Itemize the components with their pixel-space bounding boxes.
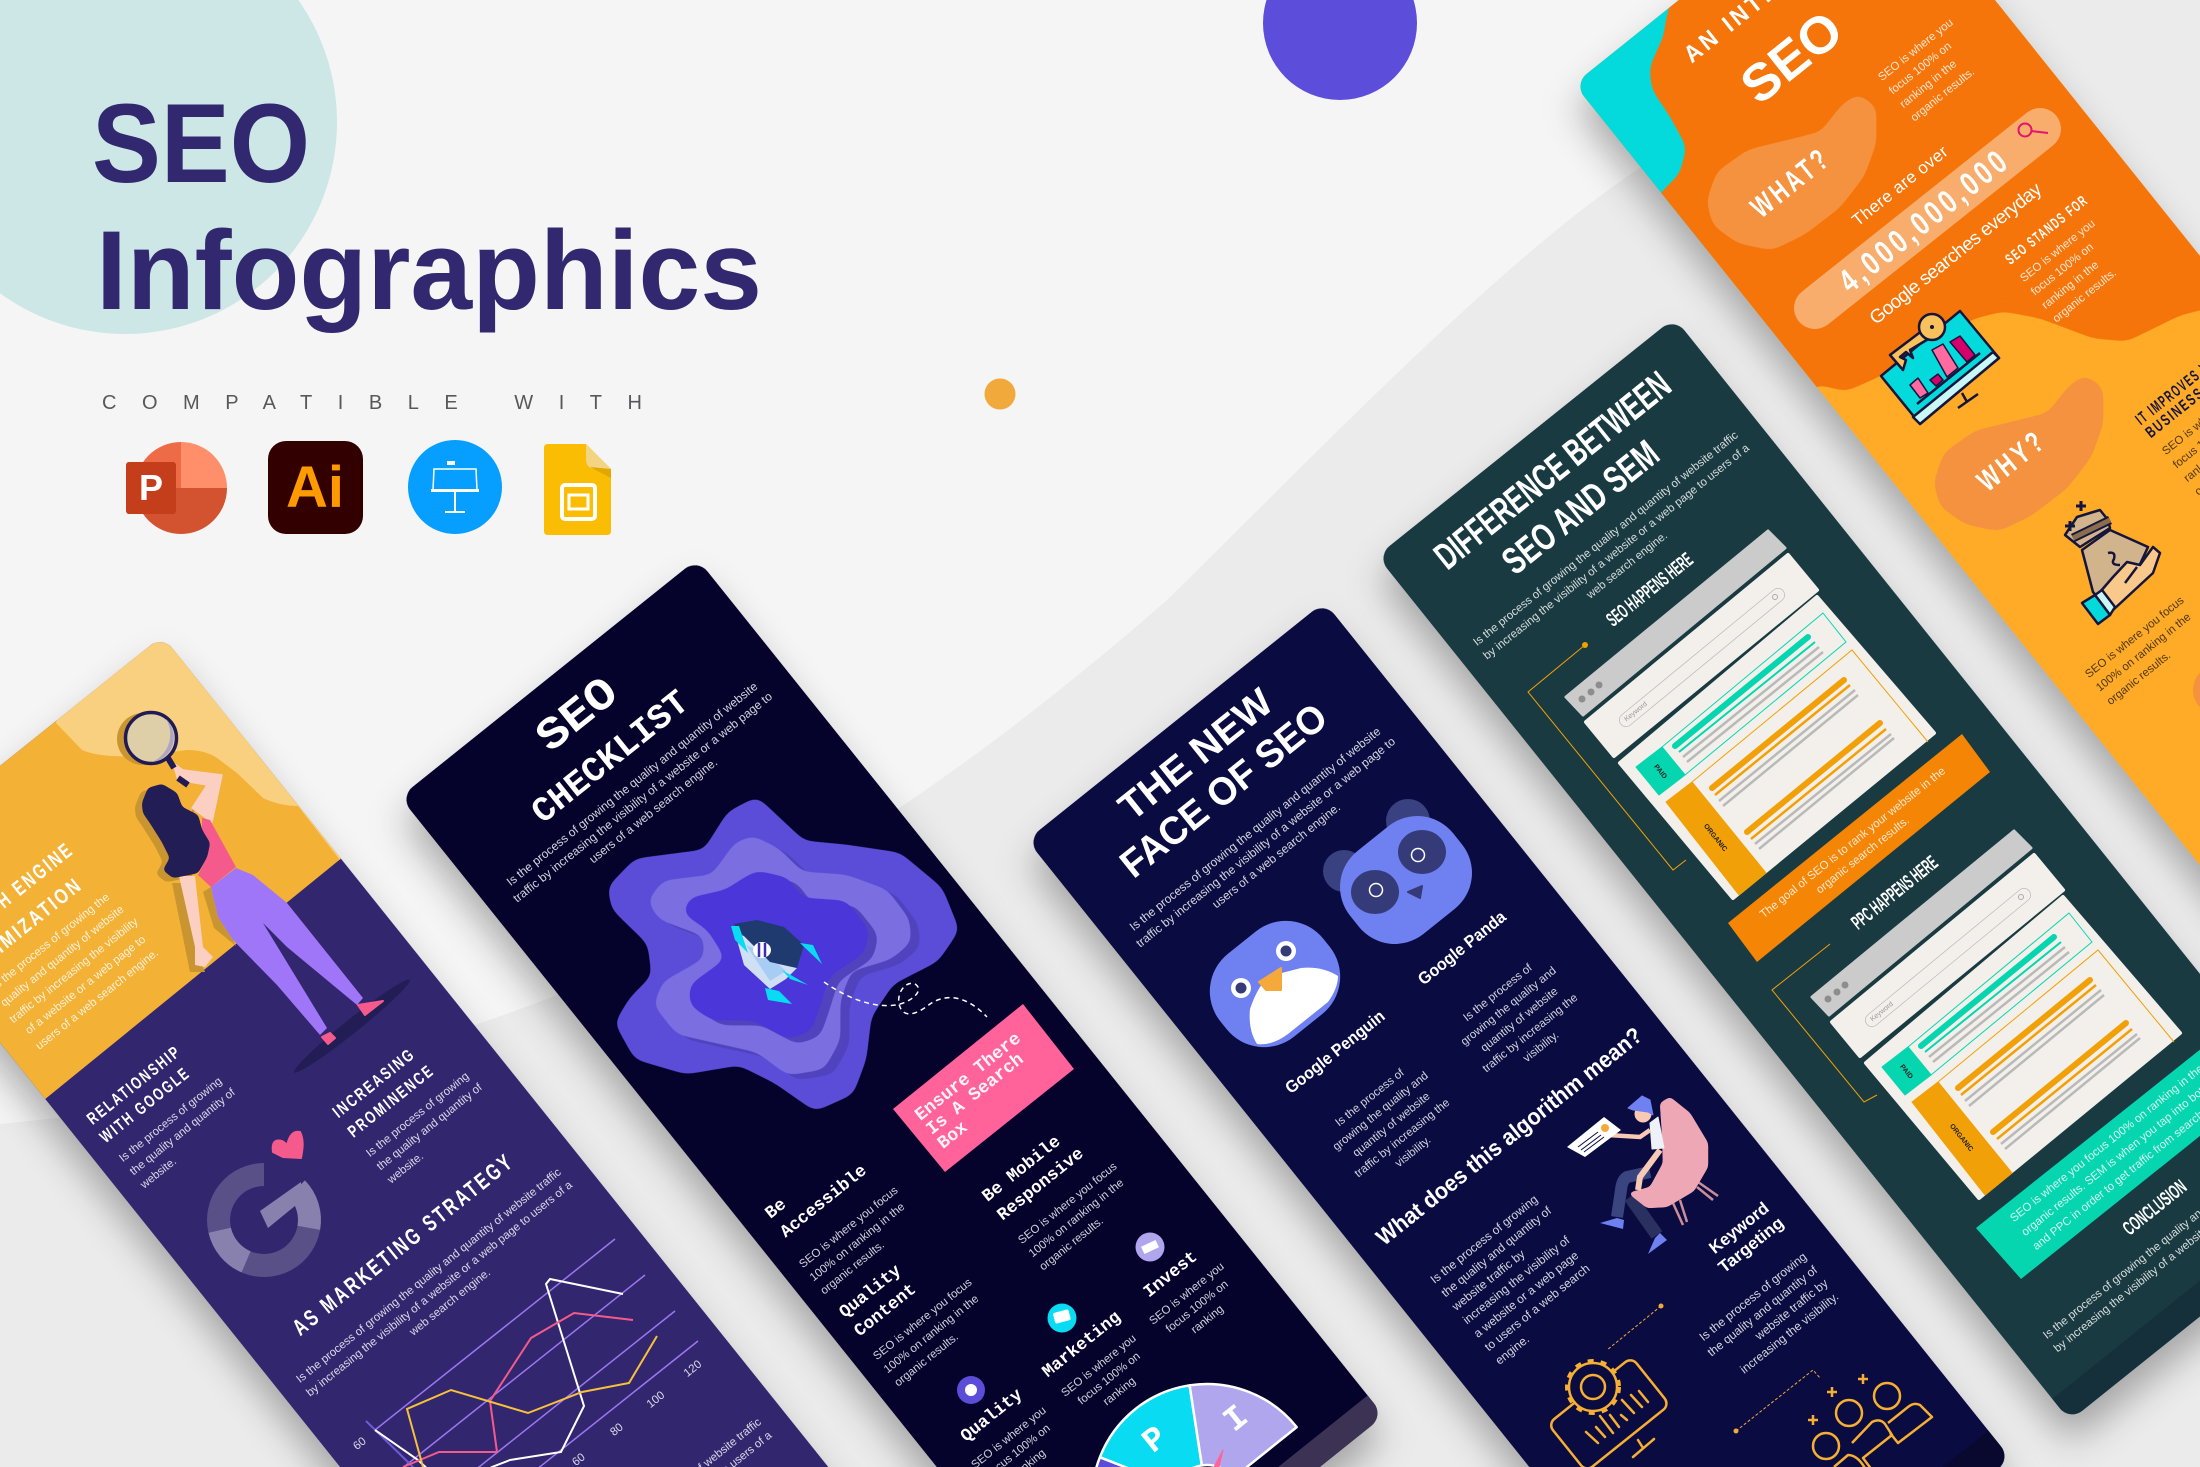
checklist item: be mobile responsive: Responsive [994, 1144, 1088, 1226]
blob: why [1934, 375, 2103, 531]
heading: what does this algorithm mean: What does this algorithm mean? [1371, 1022, 1647, 1250]
search pill with number: 4,000,000,000 [1831, 141, 2017, 299]
text: why paragraph: organic results. [2105, 650, 2173, 708]
checklist item: quality [957, 1385, 1069, 1467]
checklist item: be mobile responsive: 100% on ranking in the [1027, 1177, 1126, 1260]
dashed connectors [1607, 1304, 1820, 1434]
line chart [351, 1239, 704, 1467]
text: checklist intro: traffic by increasing the visibility of a website or a web page to [510, 689, 775, 905]
purple decorative circle [1263, 0, 1417, 100]
dashed flight path [824, 982, 987, 1017]
chart: PI wheel [1092, 1384, 1297, 1467]
text: penguin paragraph: Is the process of [1333, 1066, 1407, 1129]
illustration: person in pink chair [1567, 1096, 1718, 1254]
checklist item: marketing: ranking [1101, 1375, 1138, 1408]
text: algorithm paragraph: Is the process of growing [1428, 1192, 1540, 1286]
panel: introduction to SEO card [1565, 0, 2200, 920]
text: panda paragraph: Is the process of [1461, 961, 1535, 1024]
heading: increasing prominence [329, 1044, 438, 1141]
text: difference intro: by increasing the visibility of a website or a web page to users of a [1481, 442, 1752, 662]
heading: an introduction to SEO [1679, 0, 1940, 116]
text: penguin paragraph: quantity of website [1351, 1091, 1433, 1159]
illustration: rocket [731, 920, 822, 1004]
icon: marketing chat [1048, 1304, 1076, 1332]
title [92, 81, 762, 333]
checklist item: marketing: SEO is where you [1059, 1333, 1139, 1399]
text: why paragraph: SEO is where you focus [2083, 594, 2187, 681]
text: keyword paragraph: increasing the visibility. [1737, 1289, 1841, 1376]
heading: keyword targeting: Targeting [1715, 1213, 1787, 1277]
label: PPC happens here: PPC HAPPENS HERE [1848, 852, 1942, 934]
teal decorative circle [0, 0, 337, 334]
illustration: panda [1321, 797, 1491, 963]
icon: monitor with key [1881, 311, 1999, 424]
text: checklist intro: Is the process of growing the quality and quantity of website [504, 679, 761, 889]
icon: PowerPoint [126, 442, 227, 534]
checklist item: quality content: SEO is where you focus [871, 1276, 975, 1363]
text: intro paragraph: quality and quantity of website [0, 904, 126, 1009]
heading: relationship with google [83, 1042, 194, 1147]
connector bracket 1 [1528, 642, 1686, 870]
browser mockup 1 [1566, 531, 1934, 898]
text: penguin paragraph: visibility. [1393, 1134, 1433, 1170]
text: stands for paragraph: focus 100% on [2029, 241, 2096, 298]
text: intro paragraph: traffic by increasing the visibility [8, 916, 141, 1026]
text: checklist intro: users of a web search engine. [586, 755, 720, 866]
labels: browser 2: PAID [1898, 1063, 1914, 1081]
heading: relationship with google: RELATIONSHIP [83, 1042, 185, 1128]
text: keyword paragraph: Is the process of growing [1697, 1250, 1809, 1344]
stat: there are over: There are over [1848, 142, 1952, 230]
text: intro paragraph: SEO is where you [1876, 17, 1956, 84]
text: panda paragraph: visibility. [1521, 1029, 1561, 1065]
text: algorithm paragraph: the quality and quantity of [1438, 1203, 1554, 1300]
checklist item: be mobile responsive: Be Mobile [979, 1132, 1065, 1207]
text: marketing paragraph: Is the process of growing the quality and quantity of website traffic [294, 1166, 564, 1386]
checklist item: be mobile responsive: organic results. [1038, 1215, 1106, 1273]
chart: PI wheel: P [1136, 1420, 1176, 1462]
text: keyword paragraph: the quality and quantity of [1705, 1262, 1821, 1359]
icon: PowerPoint: P [139, 467, 163, 508]
text: prominence paragraph: website. [385, 1150, 426, 1187]
text: difference intro: Is the process of growing the quality and quantity of website traffic [1471, 429, 1741, 649]
chart: PI wheel: I [1217, 1399, 1257, 1441]
banner: goal of SEO [1728, 734, 1990, 962]
labels: browser 1: ORGANIC [1702, 823, 1728, 853]
panel: SEO checklist card [400, 559, 1393, 1467]
icon: quality bolt [957, 1376, 985, 1404]
connector bracket 2 [1772, 944, 1877, 1102]
heading: keyword targeting: Keyword [1705, 1198, 1773, 1258]
checklist item: invest: Invest [1140, 1247, 1202, 1303]
text: marketing paragraph: web search engine. [407, 1267, 493, 1339]
icon: money bag in hand [2065, 501, 2160, 624]
line chart: 100 [645, 1389, 667, 1411]
checklist item: marketing: Marketing [1039, 1308, 1125, 1382]
heading: the new face of SEO: THE NEW [1111, 681, 1281, 829]
text: penguin paragraph: traffic by increasing the [1353, 1097, 1452, 1180]
blob: partial right [2193, 665, 2200, 715]
text: panda paragraph: growing the quality and [1459, 965, 1559, 1048]
heading: as marketing strategy: AS MARKETING STRATEGY [287, 1148, 519, 1340]
checklist item: invest: SEO is where you [1147, 1261, 1227, 1327]
text: penguin paragraph: growing the quality and [1331, 1070, 1431, 1153]
stat: google searches everyday: Google searches everyday [1866, 179, 2046, 329]
text: stands for paragraph: organic results. [2051, 267, 2119, 325]
text: stands for paragraph: ranking in the [2040, 259, 2101, 312]
labels: browser 2 [1869, 1001, 1974, 1153]
illustration: woman with magnifier [117, 712, 414, 1078]
title: Infographics [96, 208, 762, 333]
line chart: 120 [682, 1358, 704, 1380]
callout: ensure there is a search box: Is A Search [923, 1050, 1028, 1140]
illustration: layered paper blob [608, 797, 959, 1111]
heading: SEO checklist: SEO [527, 668, 629, 764]
text: keyword paragraph: website traffic by [1752, 1276, 1831, 1343]
heading: search engine optimization [0, 838, 87, 984]
heading: it improves your business [2133, 343, 2200, 442]
heading: difference between SEO and SEM: DIFFERENCE BETWEEN [1427, 364, 1679, 578]
panel: new face of SEO card [1027, 602, 2013, 1467]
title: SEO [92, 81, 310, 206]
text: intro paragraph: users of a web search engine. [34, 947, 161, 1052]
checklist item: invest: ranking [1189, 1303, 1226, 1336]
icon: Google G [219, 1174, 309, 1266]
heading: SEO stands for: SEO STANDS FOR [2002, 192, 2092, 268]
heading: keyword targeting [1705, 1198, 1787, 1277]
labels: browser 1 [1623, 701, 1728, 853]
text: algorithm paragraph: website traffic by [1448, 1247, 1528, 1314]
heading: increasing prominence: INCREASING [329, 1044, 419, 1122]
text: intro paragraph: ranking in the [1898, 58, 1959, 111]
icon: Google Slides [544, 444, 611, 535]
text: intro paragraph: focus 100% on [1887, 40, 1954, 97]
checklist item: be accessible: organic results. [819, 1239, 887, 1297]
callout: ensure there is a search box [893, 1004, 1074, 1172]
checklist item: be mobile responsive [979, 1126, 1141, 1273]
text: panda paragraph: traffic by increasing the [1481, 992, 1580, 1075]
text: algorithm paragraph: a website or a web page [1471, 1248, 1581, 1340]
banner: SEO vs SEM summary [1976, 1050, 2200, 1279]
text: relationship paragraph: website. [138, 1155, 179, 1192]
checklist item: quality content: Quality [836, 1261, 906, 1323]
icon: Illustrator [268, 441, 363, 534]
checklist item: quality content: Content [851, 1280, 921, 1342]
label: why: WHY? [1971, 424, 2053, 498]
text: difference intro: web search engine. [1584, 530, 1670, 602]
label: google panda: Google Panda [1414, 907, 1510, 989]
checklist item: be mobile responsive: SEO is where you focus [1016, 1160, 1120, 1247]
labels: browser 1: Keyword [1623, 701, 1649, 723]
checklist item: invest: focus 100% on [1164, 1278, 1231, 1335]
icon: heart [273, 1132, 303, 1158]
text: intro paragraph: of a website or a web page to [23, 934, 148, 1037]
label: what: WHAT? [1745, 141, 1837, 225]
icon: gear and monitor [1548, 1357, 1670, 1467]
icon: invest [1136, 1232, 1164, 1262]
banner: goal of SEO: The goal of SEO is to rank your website in the [1758, 765, 1948, 921]
panel: search engine optimization card [0, 642, 836, 1467]
checklist item: quality: Quality [957, 1385, 1027, 1447]
icon: Keynote [408, 440, 502, 534]
heading: difference between SEO and SEM [1427, 364, 1679, 583]
text: new face intro: traffic by increasing the visibility of a website or a web page to [1133, 734, 1398, 950]
banner: SEO vs SEM summary: SEO is where you focus 100% on ranking in the [2008, 1063, 2200, 1225]
text: prominence paragraph: Is the process of growing [364, 1070, 472, 1160]
checklist item: quality content [836, 1261, 996, 1389]
heading: relationship with google: WITH GOOGLE [96, 1063, 194, 1147]
label: google penguin: Google Penguin [1281, 1006, 1389, 1098]
blob: what [1707, 94, 1876, 250]
banner: goal of SEO: organic search results. [1814, 815, 1912, 896]
text: algorithm paragraph: engine. [1493, 1332, 1532, 1367]
text: panda paragraph: quantity of website [1479, 986, 1561, 1054]
callout: ensure there is a search box: Ensure There [912, 1029, 1025, 1126]
line chart: 80 [608, 1421, 626, 1439]
checklist item: be accessible: 100% on ranking in the [808, 1201, 907, 1284]
text: relationship paragraph: Is the process of growing [117, 1075, 225, 1165]
compatible with label: COMPATIBLE WITH [102, 392, 642, 414]
text: relationship paragraph: the quality and quantity of [128, 1086, 238, 1178]
labels: browser 2: Keyword [1869, 1001, 1895, 1023]
heading: increasing prominence: PROMINENCE [344, 1061, 438, 1141]
labels: browser 2: ORGANIC [1948, 1123, 1974, 1153]
checklist item: be accessible: Be [762, 1195, 791, 1224]
checklist item: marketing: focus 100% on [1076, 1350, 1143, 1407]
orange decorative dot [984, 378, 1016, 410]
text: new face intro: Is the process of growing the quality and quantity of website [1127, 724, 1384, 934]
line chart: 60 [351, 1435, 369, 1453]
text: new face intro: users of a web search engine. [1209, 800, 1343, 911]
text: why paragraph: 100% on ranking in the [2094, 611, 2193, 694]
text: intro paragraph: organic results. [1909, 66, 1977, 124]
checklist item: quality content: 100% on ranking in the [882, 1293, 981, 1376]
checklist item: be accessible: Accessible [777, 1161, 871, 1243]
heading: SEO checklist: CHECKLIST [524, 683, 698, 833]
text: algorithm paragraph: to users of a web search [1482, 1261, 1592, 1354]
text: stands for paragraph: SEO is where you [2018, 218, 2098, 285]
browser mockup 2 [1812, 831, 2180, 1198]
labels: browser 1: PAID [1652, 763, 1668, 781]
illustration: penguin [1190, 901, 1360, 1067]
panel: difference between SEO and SEM card [1377, 318, 2200, 1430]
checklist item: marketing [1039, 1308, 1159, 1425]
heading: an introduction to SEO: SEO [1730, 0, 1854, 116]
checklist item: quality content: organic results. [893, 1331, 961, 1389]
text: prominence paragraph: the quality and quantity of [375, 1081, 485, 1173]
checklist item: be accessible [762, 1143, 922, 1297]
checklist item: be accessible: SEO is where you focus [797, 1184, 901, 1271]
text: marketing paragraph: by increasing the visibility of a website or a web page to users of a [304, 1179, 575, 1399]
heading: the new face of SEO: FACE OF SEO [1112, 695, 1336, 887]
callout: ensure there is a search box: Box [934, 1118, 972, 1154]
checklist item: invest [1140, 1247, 1247, 1353]
heading: difference between SEO and SEM: SEO AND SEM [1495, 433, 1667, 583]
label: SEO happens here: SEO HAPPENS HERE [1603, 549, 1697, 631]
text: algorithm paragraph: increasing the visibility of [1460, 1233, 1573, 1327]
icon: team [1808, 1374, 1932, 1467]
icon: Illustrator: Ai [286, 455, 344, 520]
